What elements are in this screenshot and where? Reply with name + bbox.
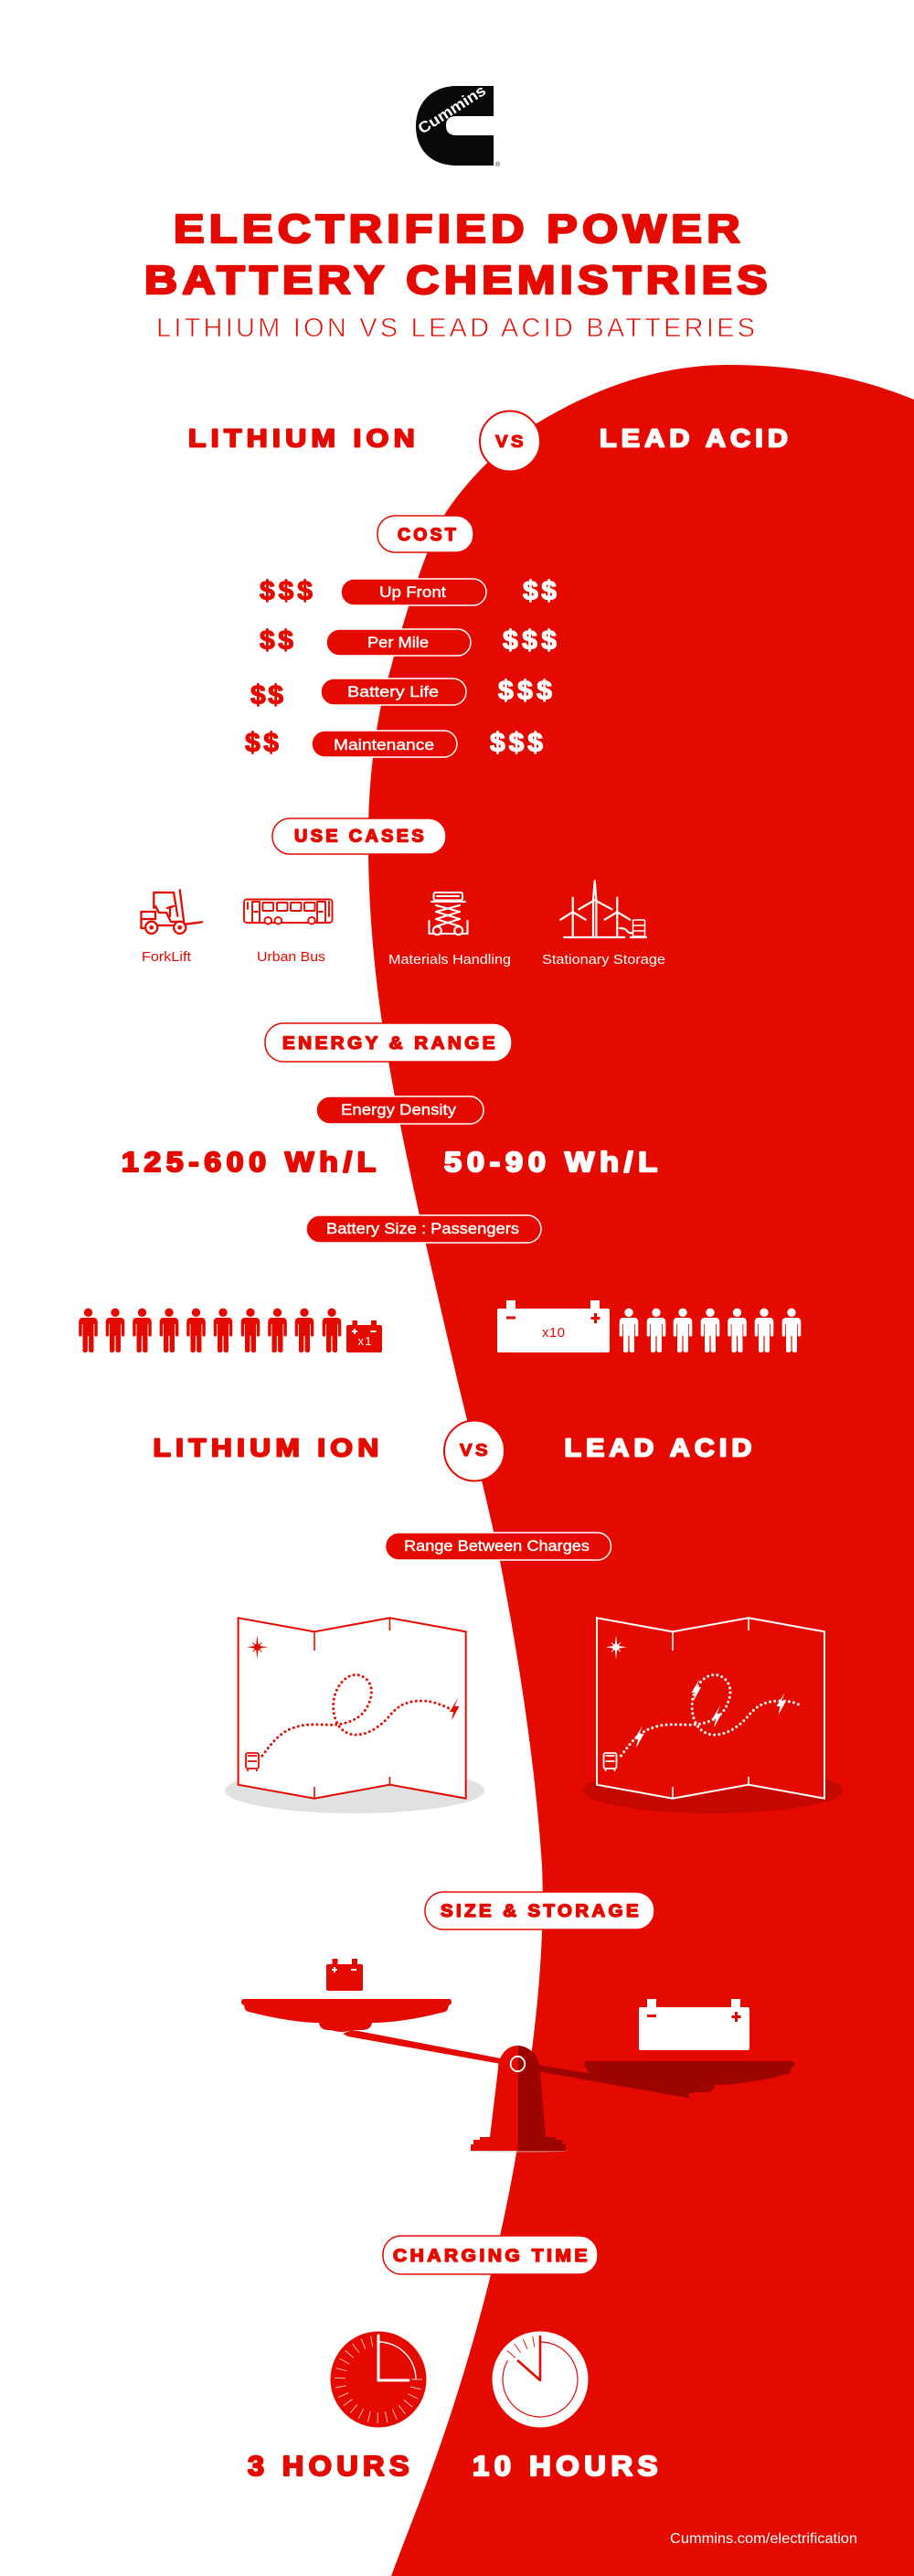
cost heading [377,516,473,552]
panel: size and storage [241,1892,794,2153]
panel: use cases [141,818,665,967]
energy density pill [316,1096,484,1124]
use cases heading: USE CASES [294,827,427,847]
row: up front: $$ [523,576,561,606]
row: per mile: $$ [260,625,298,656]
route [262,1675,449,1756]
row: maintenance: $$$ [490,728,547,758]
energy density pill: Energy Density [341,1101,457,1118]
clock: ten hours [492,2332,589,2427]
row: battery life: $$$ [498,676,557,706]
compass [247,1635,268,1659]
row: maintenance: $$ [245,728,283,758]
row: maintenance: Maintenance [334,736,434,754]
title: BATTERY CHEMISTRIES [144,258,772,303]
battery size pill: Battery Size : Passengers [326,1220,519,1237]
label: ten hours: 10 HOURS [473,2450,663,2482]
logo: Cummins: ® [495,161,501,168]
energy heading [265,1023,512,1062]
title [144,207,772,303]
scale [241,1959,794,2153]
row: maintenance [245,728,547,758]
row: per mile [260,625,561,656]
pictogram: lithium passengers and battery [79,1309,382,1352]
comparison header 1: LITHIUM ION [188,424,420,452]
icon: bolt [450,1698,459,1721]
label: Stationary Storage [542,952,665,967]
clock: three hours [331,2332,426,2427]
pivot stand [471,2046,517,2151]
range pill [386,1533,611,1560]
logo: Cummins [415,81,501,168]
vs badge: VS [460,1441,491,1459]
icon: urban bus [244,900,333,924]
icon: forklift [141,890,202,934]
battery size pill [306,1215,541,1243]
icon: scissor lift [430,893,468,935]
right pan and beam [537,2061,794,2098]
comparison header 2: LITHIUM ION [154,1434,384,1461]
map: lead acid [583,1618,843,1813]
small battery [326,1959,363,1991]
background: red curved panel [368,365,914,2576]
panel: charging time [248,2236,663,2482]
use cases heading [272,818,446,854]
label: ForkLift [142,949,192,965]
logo: Cummins: Cummins [415,81,489,137]
charging heading [383,2236,598,2274]
panel: energy and range [79,1023,801,1352]
vs badge [444,1421,505,1481]
vs badge [480,412,540,472]
row: up front: $$$ [260,576,317,606]
lead acid energy density: 50-90 Wh/L [444,1146,663,1178]
label: three hours: 3 HOURS [248,2450,414,2482]
icon: wind turbines and storage [560,881,646,937]
pictogram: lead acid battery and passengers [497,1300,801,1352]
comparison header 2: LEAD ACID [565,1434,757,1461]
row: per mile: $$$ [503,625,561,656]
pictogram: lead acid battery and passengers: x10 [542,1325,565,1341]
energy heading: ENERGY & RANGE [282,1034,498,1053]
icon: bus [603,1753,616,1771]
panel: range between charges [225,1533,843,1813]
size heading [425,1892,654,1929]
icons: charging bolts [634,1679,786,1748]
row: battery life [250,676,557,711]
ground shadow [467,2149,568,2153]
pictogram: lithium passengers and battery: x1 [358,1334,371,1348]
row: battery life: Battery Life [347,683,439,700]
title: ELECTRIFIED POWER [174,207,745,251]
label: Urban Bus [257,949,325,965]
subtitle: LITHIUM ION VS LEAD ACID BATTERIES [156,314,755,343]
icon: bus [246,1753,259,1771]
row: per mile: Per Mile [367,634,429,651]
comparison header 1: LEAD ACID [600,424,792,452]
footer url: Cummins.com/electrification [670,2531,857,2547]
range pill: Range Between Charges [404,1537,590,1555]
row: up front: Up Front [379,583,446,601]
route [622,1675,802,1756]
panel: cost [245,516,561,758]
size heading: SIZE & STORAGE [441,1902,642,1921]
comparison header 2 [154,1421,757,1481]
large battery [639,1999,749,2050]
map: lithium ion [225,1618,484,1813]
cost heading: COST [398,526,459,545]
row: battery life: $$ [250,680,288,711]
comparison header 1 [188,412,792,472]
lithium energy density: 125-600 Wh/L [122,1146,381,1178]
compass [605,1635,627,1659]
left pan and beam [241,1999,501,2064]
label: Materials Handling [388,952,511,967]
row: up front [260,576,561,606]
charging heading: CHARGING TIME [393,2247,590,2266]
vs badge: VS [495,433,526,451]
